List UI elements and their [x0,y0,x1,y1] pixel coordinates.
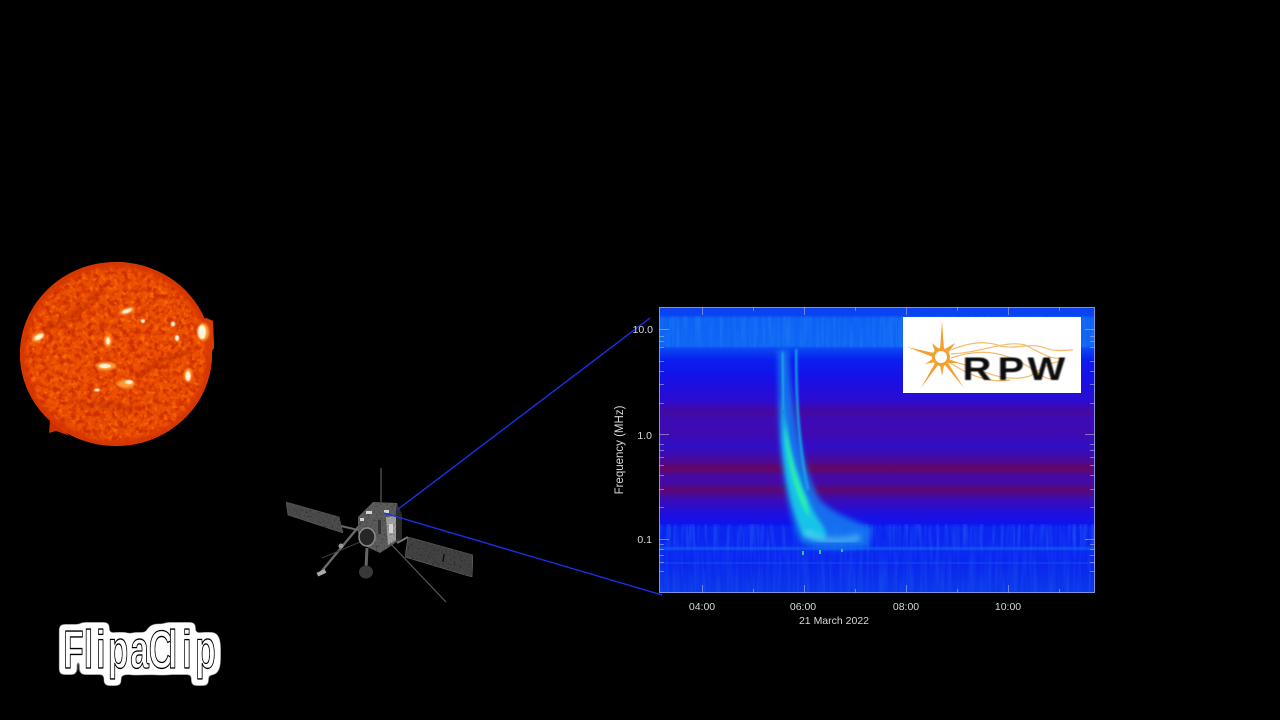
x-axis labels: 04:00 [689,601,715,613]
x-axis labels: 08:00 [893,601,919,613]
y-axis labels [633,324,653,546]
left solar panel [286,502,343,533]
FlipaClip watermark: p [108,619,128,680]
FlipaClip watermark: i [96,619,105,680]
logo wordmark: R [962,351,991,387]
solar wind lines [950,343,1073,381]
boom tip [317,569,326,577]
chart border and ticks [660,308,1094,592]
icon: sun [15,258,219,450]
FlipaClip watermark: C [149,619,173,680]
FlipaClip watermark [63,619,216,680]
x-axis labels: 10:00 [995,601,1021,613]
y-axis labels: 10.0 [633,324,653,336]
high gain dish [359,566,373,578]
horizontal interference lines [659,547,1095,550]
radio burst [778,349,872,549]
FlipaClip watermark: a [130,619,150,680]
y-axis title: Frequency (MHz) [614,405,626,494]
spacecraft: Solar Orbiter [286,468,473,602]
logo wordmark: P [998,351,1024,387]
chart: RPW radio spectrogram [614,307,1095,627]
y-axis labels: 1.0 [637,430,652,442]
streak texture [659,316,1095,348]
FlipaClip watermark: p [195,619,216,680]
small prominence [49,420,70,436]
x-axis title: 21 March 2022 [799,615,869,627]
FlipaClip watermark: i [182,619,192,680]
FlipaClip watermark: F [63,619,84,680]
icon: orange star [907,321,964,388]
RPW logo [903,317,1081,393]
FlipaClip watermark: l [84,619,93,680]
small burst specks [802,549,843,555]
antennas and booms [321,468,446,602]
FlipaClip watermark: l [168,619,177,680]
body [358,502,402,553]
x-axis labels [689,601,1021,613]
y-axis labels: 0.1 [637,534,652,546]
logo wordmark: W [1028,351,1066,387]
blue beam lines [384,318,662,595]
x-axis labels: 06:00 [790,601,816,613]
right solar panel [405,537,473,577]
